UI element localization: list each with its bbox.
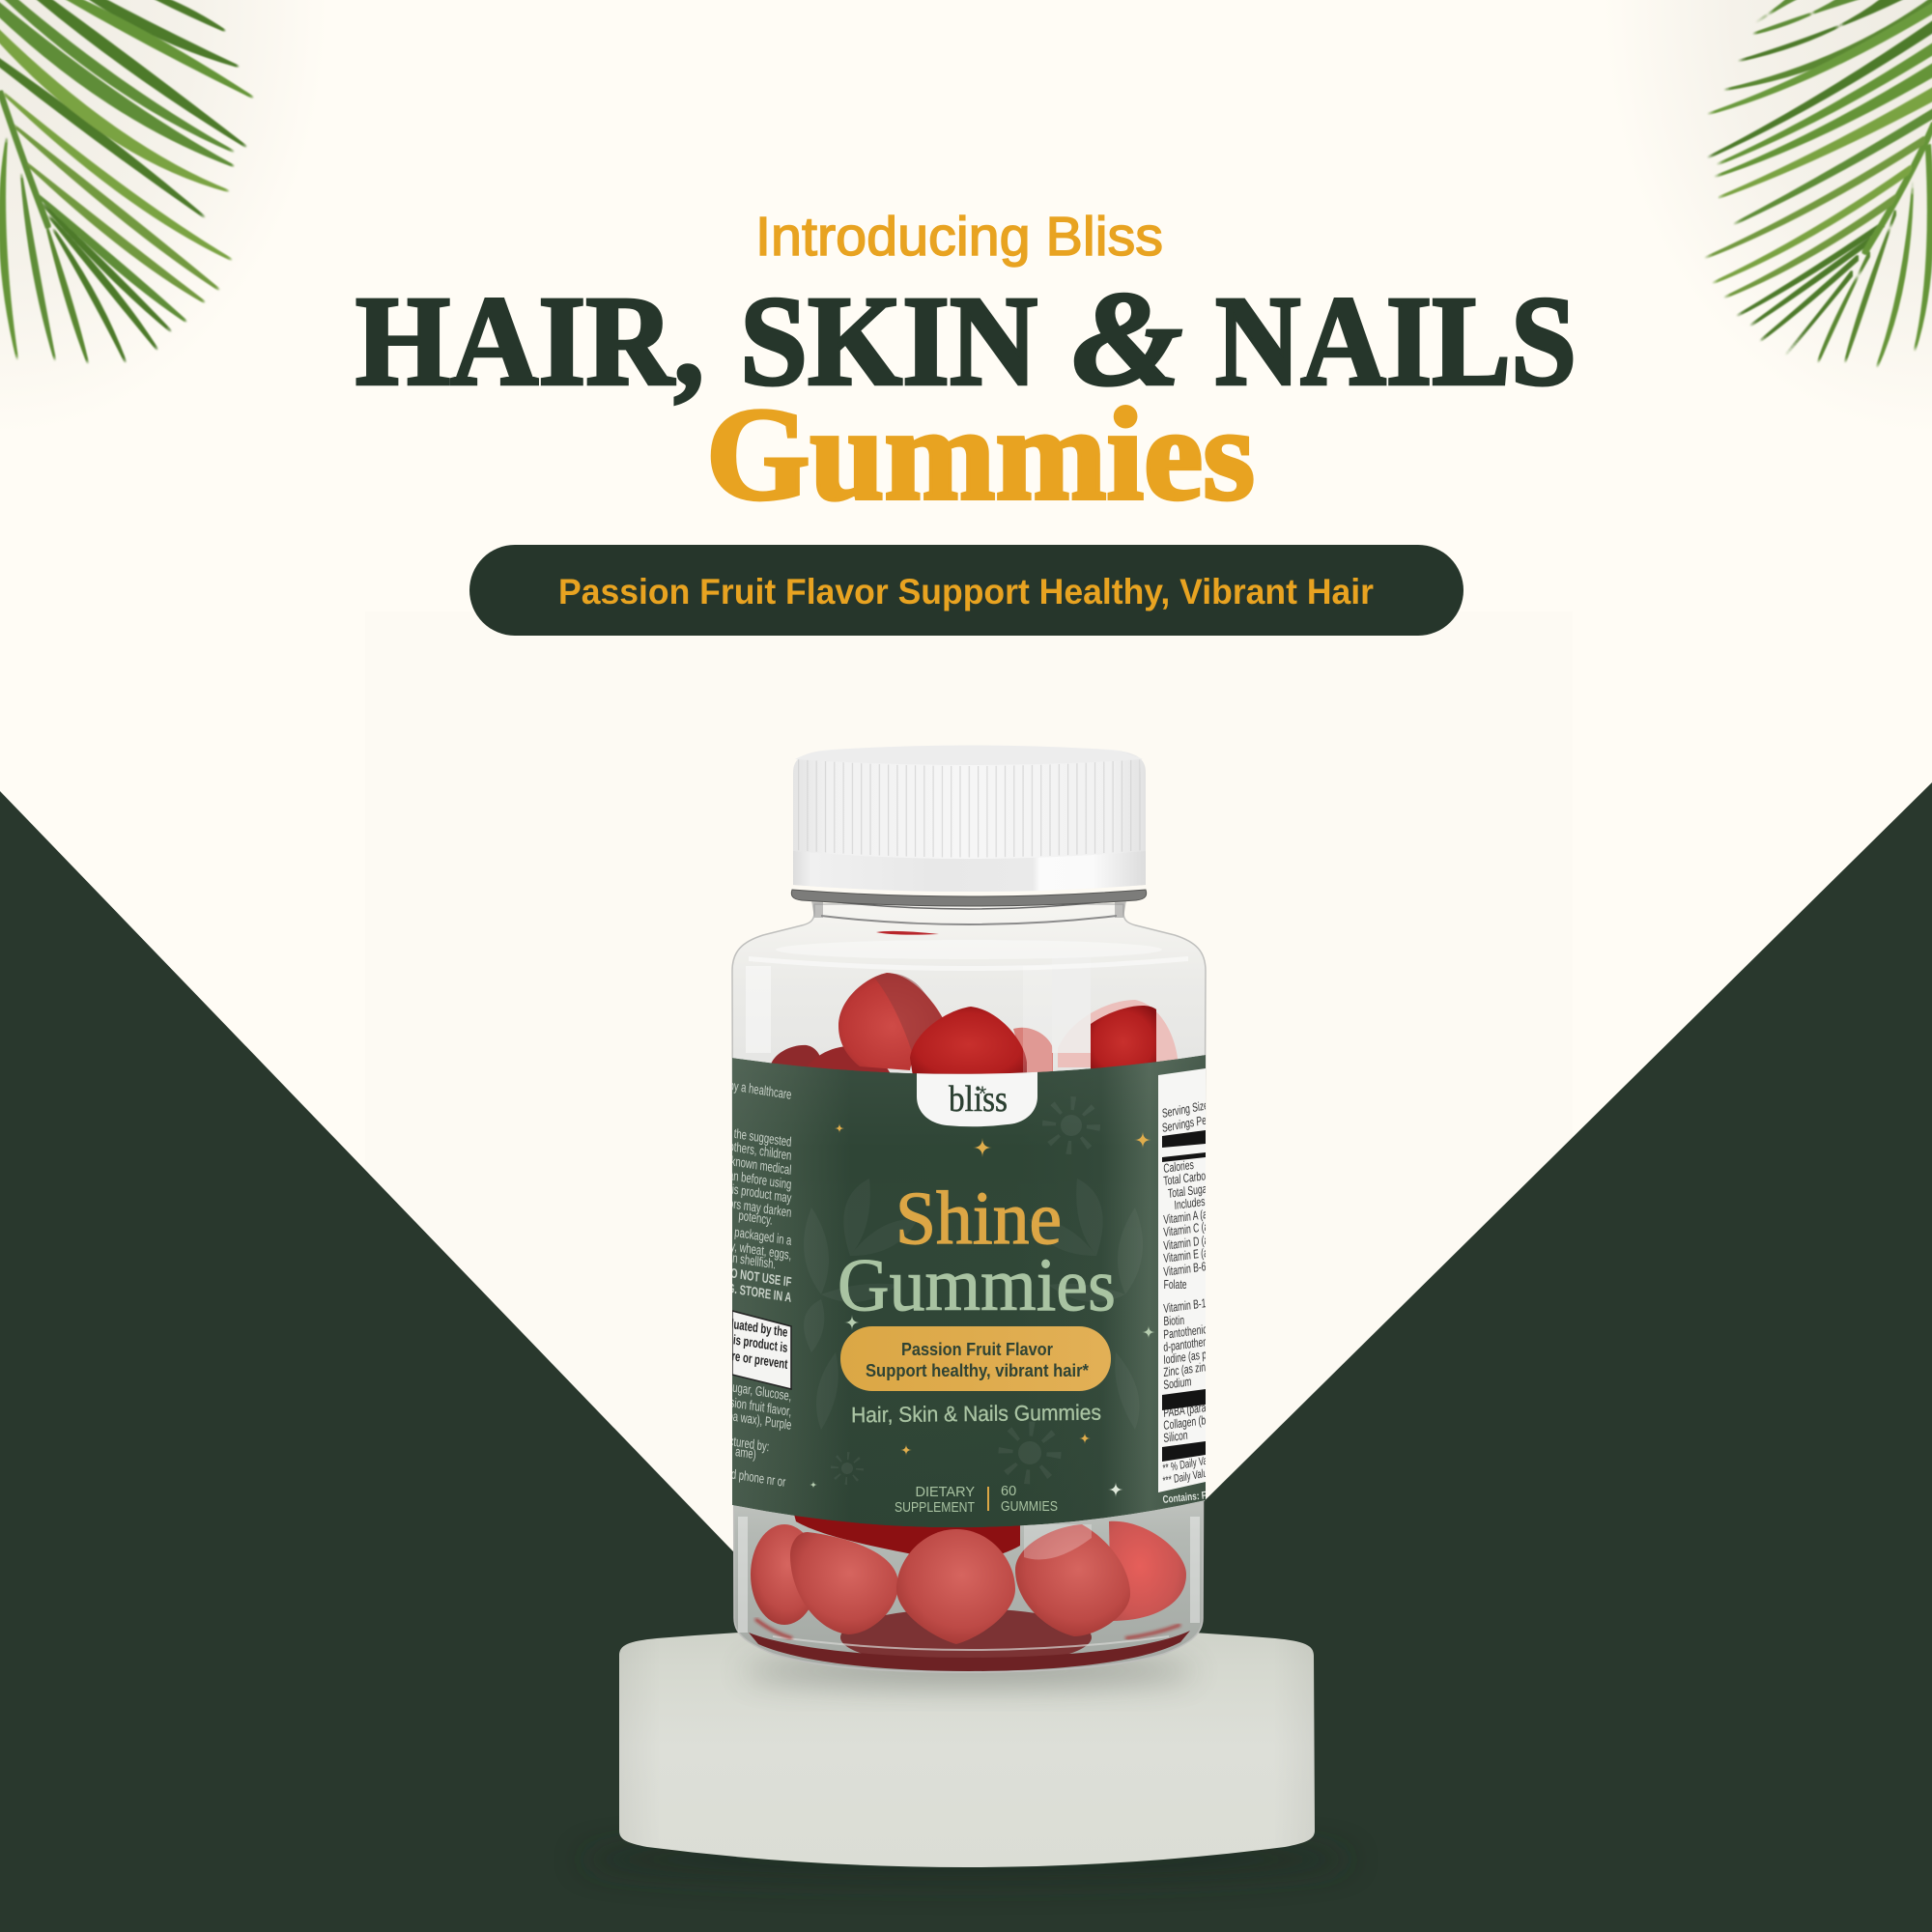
right panel: supplement facts: Sodium [1163, 1376, 1192, 1393]
palm leaf: top right [1604, 0, 1932, 435]
main title: Hair, Skin & Nails: SKIN [740, 269, 1037, 412]
left panel: directions text: ba wax), Purple [727, 1407, 792, 1434]
left panel: directions text: mothers, children [721, 1137, 792, 1163]
right panel: supplement facts: Includes 4 g Added [1174, 1190, 1245, 1213]
gold divider [987, 1487, 989, 1511]
right panel: supplement facts: Pantothenic Acid (as [1163, 1319, 1239, 1343]
left panel: directions text: colors may darken [716, 1193, 792, 1220]
dietary supplement note: SUPPLEMENT [895, 1500, 975, 1516]
main title: Hair, Skin & Nails: NAILS [1215, 269, 1577, 412]
right panel: supplement facts: Serving Size 2 Gummies [1161, 1091, 1254, 1122]
right panel: supplement facts: Servings Per Container [1161, 1106, 1248, 1136]
flavor badge: Passion Fruit Flavor [901, 1340, 1053, 1359]
left panel: FDA disclaimer box [732, 1310, 792, 1390]
right panel: supplement facts: d-pantothenate [1163, 1334, 1219, 1355]
left panel: directions text: this product may [724, 1179, 792, 1206]
upper gummies [770, 973, 1179, 1076]
tagline pill [469, 545, 1463, 636]
dietary supplement note: DIETARY [915, 1485, 975, 1500]
glass reflection bands over upper gummies [746, 931, 1188, 1072]
left panel: directions text: ING. STORE IN A [718, 1278, 792, 1306]
jar base with red reflections [749, 1619, 1190, 1671]
left panel: FDA disclaimer box: evaluated by the [716, 1314, 788, 1341]
left panel: directions text: crustacean shellfish. [693, 1243, 777, 1272]
brand tab: bliss logo: bliss [949, 1079, 1008, 1120]
right panel: supplement facts: Silicon [1163, 1429, 1188, 1446]
flavor badge: Support healthy, vibrant hair* [866, 1361, 1089, 1380]
left panel: directions text: g, Sugar, Glucose, [716, 1377, 792, 1404]
dietary supplement note [895, 1487, 975, 1512]
left panel: directions text: ame) [735, 1443, 756, 1463]
label background [732, 1055, 1206, 1527]
right panel: supplement facts: Folate [1164, 1278, 1186, 1293]
jar neck ring [791, 890, 1147, 906]
right panel: supplement facts: Vitamin D (as cholecalciferol) [1163, 1226, 1270, 1254]
left panel: directions text: ish, soy, wheat, eggs, [703, 1234, 792, 1263]
right panel: supplement facts: Total Carbohydrate [1163, 1166, 1234, 1189]
product name: Gummies: Gummies [838, 1242, 1116, 1326]
product label [732, 1055, 1206, 1528]
jar cap [793, 746, 1146, 892]
gummy count: 60 [1001, 1484, 1016, 1499]
left panel: directions text: (passion fruit flavor, [712, 1392, 792, 1419]
left panel: directions text: nufactured by: [711, 1430, 770, 1455]
background: dark green V-shaped field [0, 782, 1932, 1932]
right panel: supplement facts: Vitamin E (as d-alpha) [1163, 1241, 1245, 1266]
right panel: supplement facts: Iodine (as potassium) [1163, 1344, 1242, 1368]
left panel: directions text [732, 1083, 792, 1487]
right panel: supplement facts: Contains: Fish (Tilapia) [1162, 1485, 1251, 1506]
descriptor line: Hair, Skin & Nails Gummies [851, 1401, 1101, 1427]
tagline pill: Passion Fruit Flavor Support Healthy, Vibrant Hair [558, 572, 1374, 611]
right panel: supplement facts: Vitamin C (as ascorbic) [1163, 1215, 1249, 1240]
right panel: supplement facts: Vitamin A (as beta-carotene) [1163, 1200, 1267, 1228]
faint backdrop panel behind jar [365, 611, 1573, 1577]
brand tab: bliss logo: * [979, 1082, 987, 1106]
faint botanical pattern [856, 1179, 1047, 1299]
right panel: supplement facts: Vitamin B-12 (as cyano) [1163, 1291, 1252, 1317]
left panel: directions text: potency. [738, 1208, 773, 1228]
left panel: directions text: known medical [730, 1153, 792, 1178]
left panel: directions text: and phone nr or [721, 1464, 786, 1491]
left panel: FDA disclaimer box: , this product is [719, 1329, 788, 1356]
supplement jar [731, 746, 1207, 1673]
left panel: FDA disclaimer box: cure or prevent [721, 1347, 788, 1372]
sparkles [810, 1123, 1155, 1497]
right panel: supplement facts: Biotin [1163, 1314, 1184, 1329]
faint sun emblems [835, 1103, 1094, 1481]
right panel: supplement facts: Total Sugars [1168, 1181, 1214, 1202]
product name: Shine: Shine [895, 1176, 1062, 1260]
right panel: supplement facts: Collagen (bovine) [1163, 1411, 1229, 1434]
label shading [732, 1055, 1206, 1072]
lower gummies [751, 1516, 1186, 1658]
right panel: supplement facts: *** Daily Value (DV) not [1162, 1461, 1242, 1489]
pedestal [619, 1626, 1315, 1867]
right panel: supplement facts: ** % Daily Value (DV) [1162, 1450, 1236, 1476]
brand tab: bliss logo [917, 1072, 1037, 1126]
left panel: directions text: by a healthcare [728, 1077, 792, 1103]
right panel: supplement facts [1158, 1068, 1270, 1506]
jar glass body [732, 904, 1206, 1672]
gummy count [1001, 1486, 1057, 1511]
flavor badge [840, 1326, 1111, 1391]
left panel: directions text: ician before using [720, 1166, 792, 1192]
jar neck [811, 900, 1126, 924]
left panel: directions text: eed the suggested [716, 1122, 792, 1150]
eyebrow heading: Introducing Bliss: Introducing Bliss [755, 206, 1163, 268]
main title: Hair, Skin & Nails [355, 265, 1577, 413]
right panel: supplement facts: Vitamin B-6 (as pyridoxine) [1163, 1253, 1263, 1280]
right panel: supplement facts: Calories [1163, 1158, 1195, 1177]
right panel: supplement facts: PABA (para-Amino) [1163, 1398, 1236, 1421]
right panel: supplement facts: Zinc (as zinc citrate) [1163, 1356, 1237, 1380]
main title: Hair, Skin & Nails: HAIR, [355, 269, 704, 412]
gummy count: GUMMIES [1001, 1499, 1058, 1515]
ground shadow under pedestal [580, 1838, 1352, 1881]
left panel: directions text: and packaged in a [716, 1221, 792, 1249]
palm leaf: top left [0, 0, 328, 435]
left panel: directions text: L. DO NOT USE IF [713, 1263, 792, 1290]
title accent: Gummies: Gummies [706, 381, 1255, 527]
gummies inside jar [738, 931, 1200, 1671]
glass reflection bands over lower gummies [738, 1517, 1200, 1633]
main title: Hair, Skin & Nails: & [1072, 265, 1182, 413]
